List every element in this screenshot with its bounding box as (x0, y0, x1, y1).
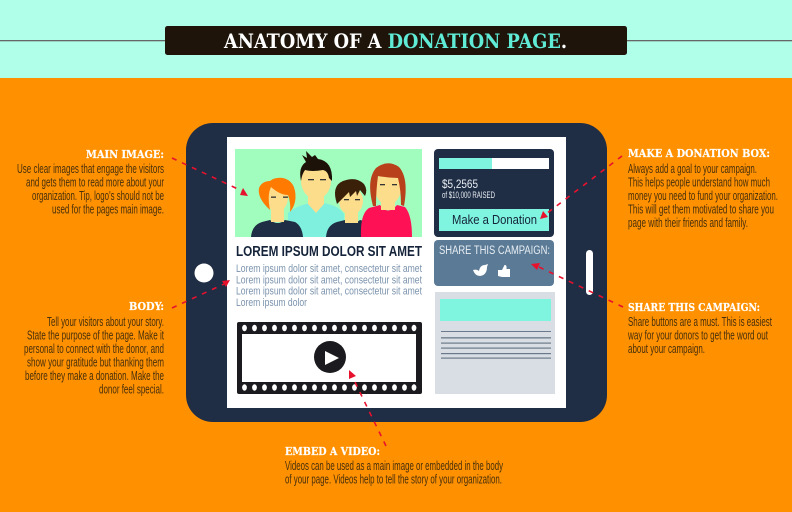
callout: main image: Use clear images that engage the visitors (17, 162, 164, 176)
article body text (236, 263, 422, 309)
title: ANATOMY OF A DONATION PAGE. (223, 29, 567, 53)
tablet screen (227, 137, 566, 408)
callout: embed a video: of your page. Videos help to tell the story of your organization. (285, 472, 502, 486)
icon: bird (473, 264, 488, 276)
callout: body: donor feel special. (99, 382, 164, 396)
donation box (434, 149, 554, 237)
article body text: Lorem ipsum dolor sit amet, consectetur sit amet (236, 286, 422, 298)
article body text: Lorem ipsum dolor sit amet, consectetur sit amet (236, 274, 422, 286)
video film strip (237, 322, 422, 394)
callout: body (24, 299, 164, 396)
callout: embed a video (285, 444, 503, 486)
callout: main image: used for the pages main image. (52, 202, 164, 216)
callout: body: BODY: (129, 299, 164, 313)
side button (586, 250, 593, 295)
arrow: donation box (540, 156, 622, 219)
callout: body: State the purpose of the page. Make it (27, 328, 164, 342)
sidebar placeholder card (435, 292, 555, 394)
callout: main image: organization. Tip, logo's should not be (32, 189, 164, 203)
arrow: main image (172, 158, 248, 196)
amount raised: $5,2565 (442, 179, 478, 191)
person: man with spiky hair (288, 151, 344, 237)
title (165, 26, 627, 55)
arrow: body (172, 280, 230, 308)
callout: embed a video: EMBED A VIDEO: (285, 444, 380, 458)
article heading: LOREM IPSUM DOLOR SIT AMET (236, 244, 422, 260)
callout: body: show your gratitude but thanking them (27, 356, 164, 370)
share box (434, 240, 554, 286)
goal text: of $10,000 RAISED (442, 190, 495, 200)
callout: share this campaign: SHARE THIS CAMPAIGN: (628, 300, 760, 314)
person: woman with auburn hair (361, 163, 412, 237)
callout: make a donation box (628, 146, 778, 230)
article body text: Lorem ipsum dolor (236, 297, 307, 309)
main image: family illustration (235, 149, 422, 237)
person: boy with dark hair (326, 179, 377, 237)
icon: thumbs up (498, 265, 510, 277)
person: woman with orange hair (251, 178, 303, 237)
callout: main image (17, 147, 164, 216)
arrow: video (349, 370, 386, 446)
callout: embed a video: Videos can be used as a main image or embedded in the body (285, 459, 503, 473)
tablet (186, 123, 607, 422)
callout: share this campaign (627, 300, 772, 356)
header band (0, 0, 792, 78)
progress bar (439, 158, 549, 169)
arrow: share campaign (531, 263, 623, 307)
article body text: Lorem ipsum dolor sit amet, consectetur sit amet (236, 263, 422, 275)
home button (194, 264, 214, 282)
callout: main image: MAIN IMAGE: (86, 147, 164, 161)
callout: body: Tell your visitors about your story. (47, 315, 164, 329)
share label: SHARE THIS CAMPAIGN: (439, 245, 550, 257)
callout: body: personal to connect with the donor, and (24, 342, 164, 356)
callout: share this campaign: about your campaign. (628, 342, 705, 356)
callout: body: before they make a donation. Make the (25, 369, 164, 383)
callout: main image: and gets them to read more about your (26, 176, 164, 190)
icon: play button (314, 341, 346, 373)
donate button: Make a Donation (452, 213, 537, 227)
callout: make a donation box: MAKE A DONATION BOX: (628, 146, 770, 160)
